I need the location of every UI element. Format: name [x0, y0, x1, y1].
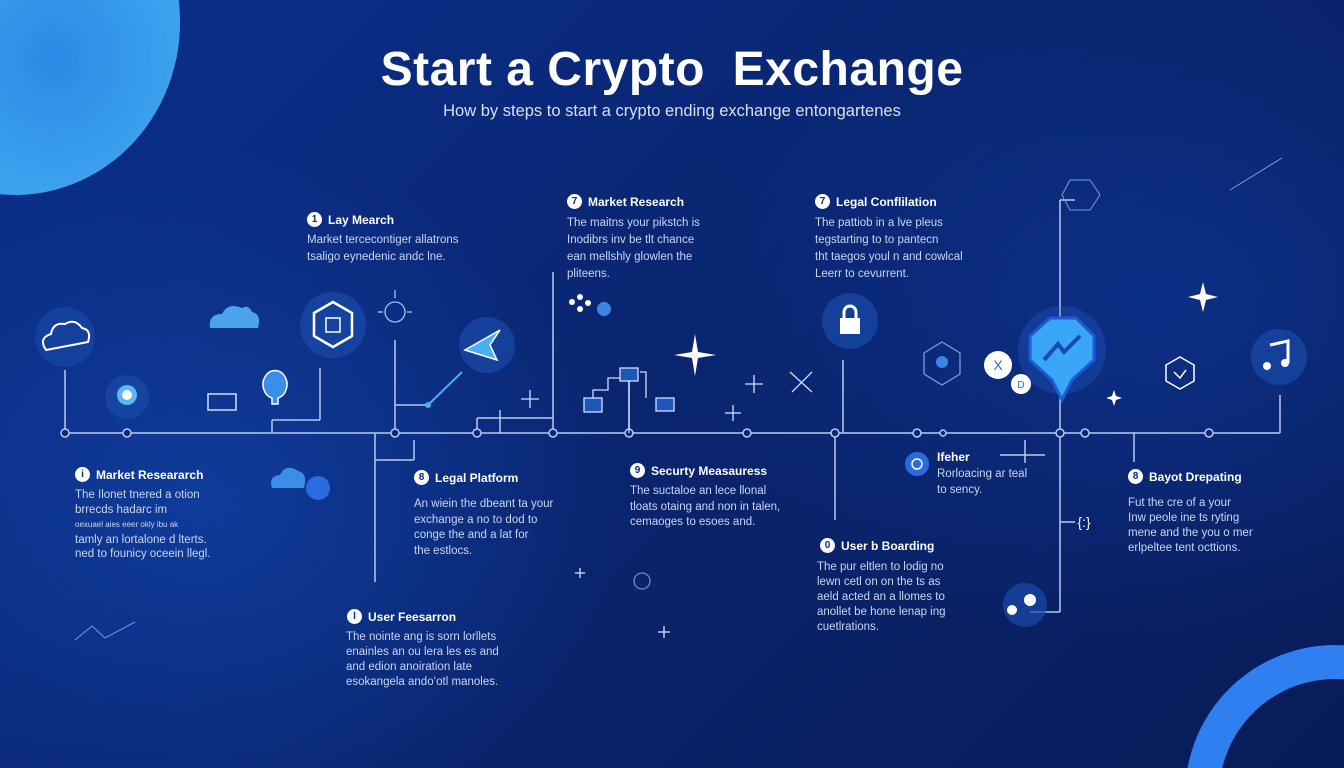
step: Legal Platform: 8 [419, 472, 424, 483]
step: User Feesarron: I [353, 611, 356, 622]
text: cemaoges to esoes and. [630, 516, 755, 528]
text: pliteens. [567, 268, 610, 280]
icon: hex pin [924, 342, 960, 385]
text [1128, 497, 1253, 554]
sparkles [674, 282, 1218, 406]
text: tegstarting to to pantecn [815, 234, 938, 246]
step: Market Research bottom [75, 467, 211, 560]
step: Market Research top [567, 194, 700, 280]
step: Ifeher [937, 450, 1027, 496]
icon: person badge [905, 452, 929, 476]
icon: star rocket with arrow [425, 317, 515, 408]
step: User Feesarron [346, 609, 499, 688]
step: User Feesarron: User Feesarron [368, 610, 456, 624]
icon: hexagon [300, 292, 366, 358]
text: brrecds hadarc im [75, 504, 167, 516]
step: Market Research top: Market Research [588, 194, 684, 208]
text: anollet be hone lenap ing [817, 606, 946, 618]
text: The Ilonet tnered a otion [75, 489, 200, 501]
text: the estlocs. [414, 544, 472, 556]
text: Inw peole ine ts ryting [1128, 512, 1239, 524]
text: The nointe ang is sorn lorllets [346, 631, 496, 643]
step: User b Boarding [817, 538, 946, 633]
text: An wiein the dbeant ta your [414, 498, 553, 510]
step: Legal Platform [414, 470, 554, 556]
step: User b Boarding: User b Boarding [841, 538, 934, 552]
text: Market tercecontiger allatrons [307, 234, 458, 246]
icon: dots [569, 294, 611, 316]
icon: bulb [263, 370, 287, 404]
text: exchange a no to dod to [414, 514, 537, 526]
subtitle: How by steps to start a crypto ending exchange entongartenes [443, 102, 901, 120]
step: Legal Conflilation: Legal Conflilation [836, 194, 937, 208]
text: tsaligo eynedenic andc lne. [307, 251, 446, 263]
icon: music [1251, 329, 1307, 385]
step: Ifeher: Ifeher [937, 450, 970, 464]
icon: robot [105, 375, 149, 419]
text [346, 631, 499, 688]
icon: bracket: {:} [1077, 514, 1091, 530]
text [307, 234, 458, 263]
step: Bayot Drepating [1128, 469, 1253, 554]
step: Security Measauress: Securty Measauress [651, 464, 767, 478]
text: The pattiob in a lve pleus [815, 217, 943, 229]
text: tht taegos youl n and cowlcal [815, 251, 963, 263]
title: Start a Crypto Exchange [381, 43, 963, 96]
text: to sency. [937, 484, 982, 496]
icon: X badge [984, 351, 1031, 394]
step: User b Boarding: 0 [825, 540, 830, 551]
icon: puzzle [1003, 583, 1047, 627]
text: The suctaloe an lece llonal [630, 485, 766, 497]
icon: cloud brain [35, 307, 95, 367]
text [815, 217, 963, 280]
text [414, 498, 554, 556]
text: conge the and a lat for [414, 529, 528, 541]
icon: glowing badge [1018, 306, 1106, 400]
text: esokangela andoʻotl manoles. [346, 676, 498, 688]
text: Rorloacing ar teal [937, 468, 1027, 480]
step: Lay Mearch [307, 212, 458, 263]
text: lewn cetl on on the ts as [817, 576, 940, 588]
heading: Lay Mearch [328, 212, 394, 226]
text [630, 485, 780, 528]
text: Leerr to cevurrent. [815, 268, 909, 280]
text: and edion anoiration late [346, 661, 472, 673]
text: tamly an lortalone d lterts. [75, 534, 207, 546]
text: The maitns your pikstch is [567, 217, 700, 229]
heading: 1 [312, 214, 317, 225]
step: Market Research bottom: Market Researarch [96, 468, 203, 482]
icon: compass [1166, 357, 1194, 389]
text: tloats otaing and non in talen, [630, 500, 780, 512]
text: ned to founicy oceein llegl. [75, 548, 211, 560]
icon: cloud small [271, 468, 330, 500]
text [937, 468, 1027, 496]
text: erlpeltee tent octtions. [1128, 542, 1241, 554]
text: oexuael aies eeer okly ibu ak [75, 520, 178, 529]
text: Inodibrs inv be tlt chance [567, 234, 694, 246]
icon: sun [378, 290, 412, 322]
step: Legal Platform: Legal Platform [435, 470, 518, 484]
text: aeld acted an a llomes to [817, 591, 945, 603]
step: Market Research top: 7 [572, 196, 577, 207]
step: Legal Conflilation [815, 194, 963, 280]
text: The pur eltlen to lodig no [817, 561, 944, 573]
text: cuetlrations. [817, 621, 879, 633]
step: Bayot Drepating: Bayot Drepating [1149, 470, 1242, 484]
text [75, 489, 211, 560]
constellations [75, 158, 1282, 640]
text: mene and the you o mer [1128, 527, 1253, 539]
step: Security Measauress [630, 463, 780, 528]
icon: cloud [210, 306, 259, 328]
icon: X badge: X [993, 357, 1003, 373]
icon: lock [822, 293, 878, 349]
icon: X badge: D [1017, 380, 1025, 391]
text: ean mellshly glowlen the [567, 251, 692, 263]
icon: small screen [208, 394, 236, 410]
step: Market Research bottom: i [81, 469, 84, 480]
text: Fut the cre of a your [1128, 497, 1231, 509]
step: Bayot Drepating: 8 [1133, 471, 1138, 482]
step: Legal Conflilation: 7 [820, 196, 825, 207]
step: Security Measauress: 9 [635, 465, 640, 476]
text: enainles an ou lera les es and [346, 646, 499, 658]
text [567, 217, 700, 280]
text [817, 561, 946, 633]
icon: flowchart [584, 368, 674, 433]
